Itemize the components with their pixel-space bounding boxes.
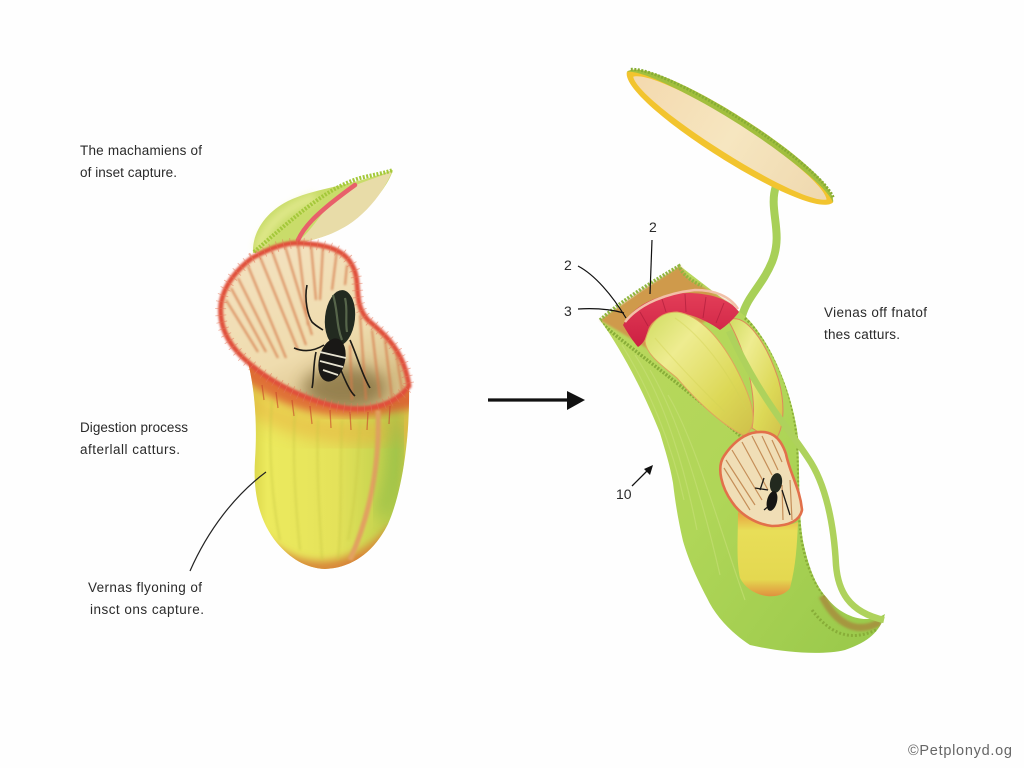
text: right caption: [824, 305, 927, 342]
pitcher body: [248, 364, 410, 569]
text: digestion caption: [80, 420, 188, 457]
illustration: closed pitcher with insect: [221, 170, 420, 579]
text: mechanisms caption: of inset capture.: [80, 165, 177, 180]
text: right caption: Vienas off fnatof: [824, 305, 927, 320]
illustration: cross-section pitcher: [600, 53, 885, 653]
callout label 3: 3: [564, 303, 572, 319]
callout label 2 top: 2: [649, 219, 657, 235]
callout label 2 left: [564, 257, 626, 318]
pitcher interior and rim: [600, 266, 735, 350]
text: digestion caption: Digestion process: [80, 420, 188, 435]
text: flying caption: [88, 580, 204, 617]
small pitcher mouth: [720, 432, 802, 526]
text: mechanisms caption: [80, 143, 202, 180]
front bulb: [645, 312, 753, 435]
leader line: [190, 472, 266, 571]
text: right caption: thes catturs.: [824, 327, 900, 342]
text: mechanisms caption: The machamiens of: [80, 143, 202, 158]
pitcher lid: [253, 170, 393, 253]
icon: trapped insect: [294, 285, 370, 396]
pitcher mouth with ribs: [221, 243, 409, 410]
callout label 10 with arrow: 10: [616, 486, 632, 502]
outer leaf silhouette: [600, 266, 885, 653]
tendril: [729, 331, 884, 620]
small pitcher body: [738, 512, 798, 596]
text: flying caption: insct ons capture.: [90, 602, 204, 617]
icon: small ant: [755, 472, 790, 515]
lid: [615, 53, 845, 221]
stem: [742, 186, 777, 316]
callout label 10 with arrow: [616, 465, 653, 502]
leaf veins and serrated edges: [600, 318, 880, 636]
copyright: ©Petplonyd.og: [908, 743, 1012, 759]
callout label 2 left: 2: [564, 257, 572, 273]
red band: [623, 293, 739, 347]
peristome pink trim: [625, 290, 738, 322]
arrow between pitchers: [488, 391, 585, 410]
callout label 2 top: [649, 219, 657, 294]
text: flying caption: Vernas flyoning of: [88, 580, 202, 595]
callout label 3: [564, 303, 624, 319]
text: digestion caption: afterlall catturs.: [80, 442, 180, 457]
rear bulb: [728, 319, 783, 442]
